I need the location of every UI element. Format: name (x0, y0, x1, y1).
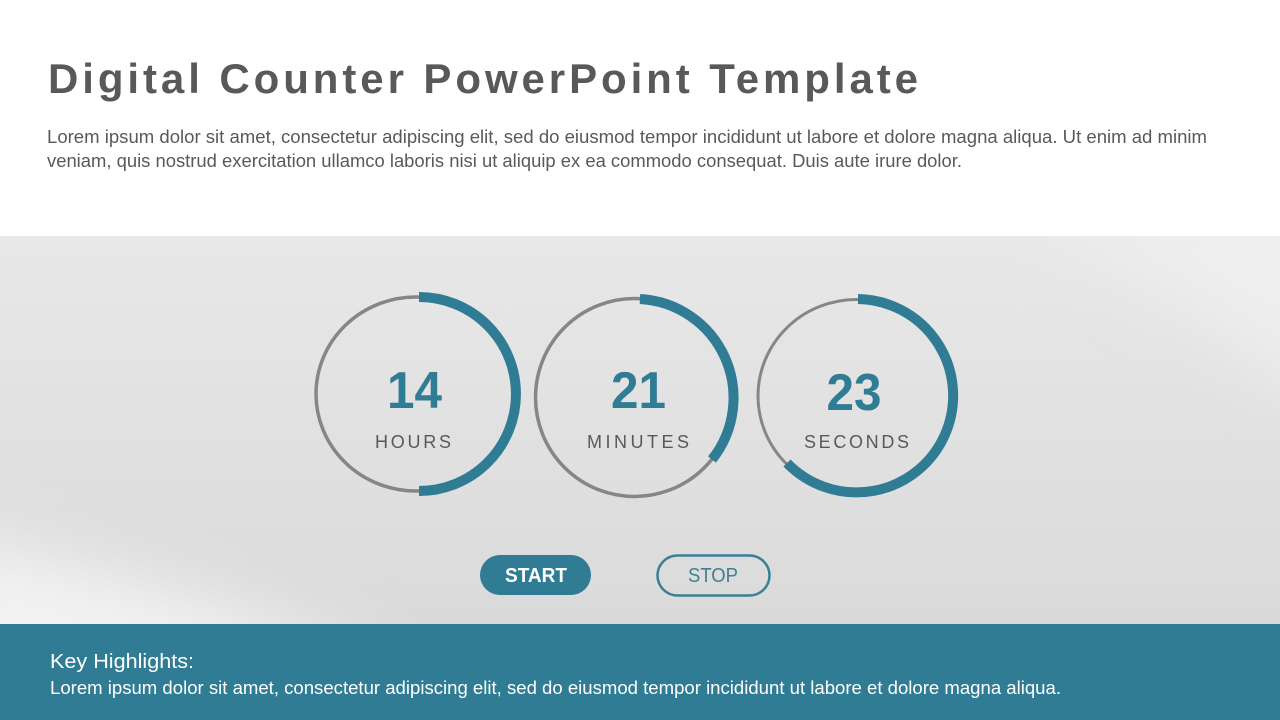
intro text block: veniam, quis nostrud exercitation ullamco laboris nisi ut aliquip ex ea commodo consequat. Duis aute irure dolor. (47, 151, 962, 171)
intro text block (47, 127, 1207, 171)
start button: START (505, 565, 567, 587)
hours track ring (316, 297, 516, 491)
counter: minutes (536, 298, 734, 496)
stop button (658, 556, 770, 596)
seconds value: 23 (826, 364, 882, 422)
counter: seconds (758, 299, 955, 492)
panel: key highlights (0, 624, 1280, 720)
seconds label: SECONDS (804, 432, 909, 452)
minutes track ring (536, 298, 734, 496)
title: Digital Counter PowerPoint Template (48, 55, 918, 102)
highlights heading: Key Highlights: (50, 651, 194, 673)
minutes label: MINUTES (587, 432, 689, 452)
intro text block: Lorem ipsum dolor sit amet, consectetur adipiscing elit, sed do eiusmod tempor incididunt ut labore et dolore magna aliqua. Ut enim ad minim (47, 127, 1207, 147)
hours label: HOURS (375, 432, 451, 452)
highlights text: Lorem ipsum dolor sit amet, consectetur adipiscing elit, sed do eiusmod tempor incididunt ut labore et dolore magna aliqua. (50, 678, 1061, 698)
start button (480, 555, 591, 595)
seconds track ring (758, 300, 955, 492)
stop button: STOP (688, 565, 738, 587)
minutes progress arc (640, 299, 734, 460)
hours value: 14 (387, 362, 442, 420)
minutes value: 21 (611, 362, 666, 420)
seconds progress arc (787, 299, 953, 492)
hours progress arc (419, 297, 516, 491)
panel: counter background (0, 236, 1280, 624)
counter: hours (316, 297, 516, 491)
